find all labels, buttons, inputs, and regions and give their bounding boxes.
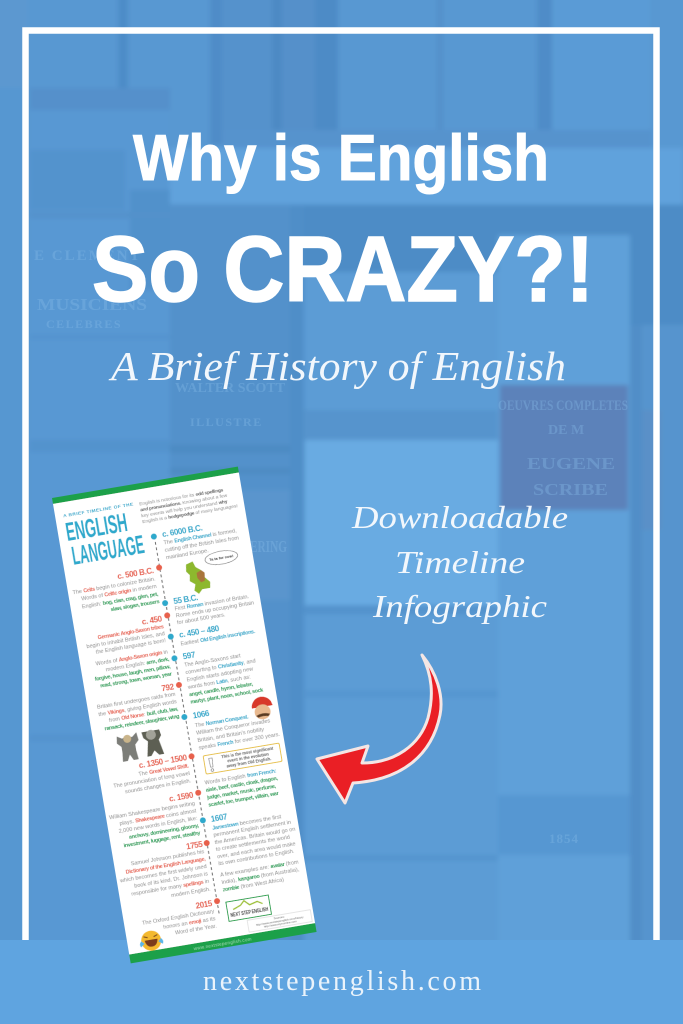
entry: 792: Britain first undergoes raids from bbox=[97, 692, 176, 711]
entry: c. 450–480 bbox=[178, 618, 256, 648]
entry: 1755: Dictionary of the English Language, bbox=[125, 856, 207, 876]
logo: Next Step English bbox=[226, 895, 271, 921]
title line 2: So CRAZY?! bbox=[92, 217, 594, 321]
entry: 792: 792 bbox=[161, 682, 175, 693]
intro paragraph: and pronunciations. Knowing about a few bbox=[140, 493, 228, 513]
icon: Norman soldier head bbox=[250, 695, 275, 721]
entry: 2015: Word of the Year. bbox=[175, 923, 218, 937]
entry: c. 6000 B.C. bbox=[161, 518, 241, 561]
entry: words from French: judge, market, music, perfume, bbox=[206, 784, 277, 801]
entry: 2015: 2015 bbox=[195, 899, 213, 911]
entry: 1607: its own contributions to English. bbox=[218, 848, 295, 867]
entry: c. 6000 B.C.: The English Channel is formed, bbox=[163, 528, 238, 546]
entry: words from French: aisle, beef, castle, cloak, dragon, bbox=[206, 776, 279, 794]
entry: 792: from Old Norse: bull, club, law, bbox=[109, 706, 179, 724]
entry: 597: martyr, plant, noon, school, sock bbox=[190, 687, 264, 706]
sheet heading: LANGUAGE bbox=[69, 529, 146, 571]
entry: 792 bbox=[95, 682, 181, 733]
entry: c. 450: c. 450 bbox=[141, 614, 163, 627]
entry: 1755: Samuel Johnson publishes his bbox=[130, 849, 205, 867]
entry: c. 1590 bbox=[107, 790, 201, 851]
entry: c. 1590: anchovy, domineering, gloomy, bbox=[129, 823, 200, 841]
intro paragraph: English is a hodgepodge of many languages! bbox=[142, 503, 238, 525]
timeline spine bbox=[154, 536, 220, 916]
entry: c. 1590: plays. Shakespeare coins almost bbox=[119, 808, 197, 827]
entry: 1755 bbox=[115, 840, 212, 907]
faint spine lettering: OEUVRES COMPLETES bbox=[498, 398, 628, 414]
icon: map of Britain with speech bubble: Ta ta for now! bbox=[209, 554, 234, 562]
entry: c. 500 B.C.: Words of Celtic origin in modern bbox=[81, 584, 157, 602]
entry: c. 450: read, strong, town, woman, year bbox=[100, 672, 172, 690]
entry: c. 450: forgive, house, laugh, men, pillow, bbox=[94, 664, 172, 683]
entry: c. 450: begin to inhabit British Isles, and bbox=[86, 631, 165, 650]
entry: 1066: William the Conqueror invades bbox=[196, 718, 271, 737]
credits box: http://www.etymonline.com bbox=[263, 919, 298, 929]
callout text: downloadable timeline infographic: Timeline bbox=[395, 544, 525, 580]
entry: 597: words from Latin, such as: bbox=[187, 674, 252, 691]
callout box: most significant event: event in the evolution bbox=[227, 751, 270, 763]
logo: Next Step English: NEXT STEP ENGLISH bbox=[230, 907, 269, 919]
entry: 1607 bbox=[210, 801, 304, 893]
credits box: http://www.nextstepenglish.com/history bbox=[256, 915, 304, 927]
entry: 1755: which becomes the first widely used bbox=[119, 864, 207, 885]
entry: 1066: Britain, and Britain's nobility bbox=[197, 727, 265, 744]
entry: c. 450: Words of Anglo-Saxon origin in bbox=[95, 649, 168, 667]
entry: 2015: The Oxford English Dictionary bbox=[142, 909, 215, 927]
entry: c. 500 B.C.: c. 500 B.C. bbox=[117, 566, 154, 581]
icon: two vikings bbox=[116, 728, 164, 762]
entry: c. 450 bbox=[83, 614, 173, 691]
sheet bbox=[52, 467, 317, 963]
entry: c. 1350–1500: c. 1350 – 1500 bbox=[138, 753, 188, 770]
entry: c. 1590: William Shakespeare begins writing bbox=[109, 801, 196, 821]
entry: 2015: honors an emoji as its bbox=[163, 916, 216, 931]
intro paragraph bbox=[139, 485, 238, 525]
entry: 1607: India), kangaroo (from Australia), bbox=[221, 867, 300, 886]
entry: 1066: 1066 bbox=[192, 709, 211, 721]
entry: 55 B.C. bbox=[173, 584, 256, 626]
bottom green bar with url: www.nextstepenglish.com bbox=[193, 936, 252, 951]
entry: 792: the Vikings, giving English words bbox=[98, 699, 178, 718]
entry: 597: converting to Christianity, and bbox=[185, 658, 256, 676]
entry: c. 450–480: Earliest Old English inscriptions. bbox=[180, 629, 256, 648]
callout box: most significant event: This is the most significant bbox=[221, 746, 274, 759]
entry: 55 B.C.: for about 500 years. bbox=[177, 612, 226, 626]
entry: 55 B.C.: Rome ends up occupying Britain bbox=[175, 600, 255, 619]
entry: 1607: zombie (from West Africa) bbox=[222, 877, 285, 893]
fourth book bbox=[498, 235, 630, 950]
faint spine lettering: DE M bbox=[548, 423, 584, 438]
entry: words from French bbox=[203, 768, 281, 809]
entry: 1607: to create settlements the world bbox=[216, 835, 290, 853]
entry: c. 6000 B.C.: cutting off the British Isles from bbox=[164, 535, 240, 554]
faint spine lettering: WALTER SCOTT bbox=[175, 381, 286, 396]
subtitle: A Brief History of English bbox=[108, 343, 566, 389]
entry: c. 500 B.C.: The Celts begin to colonize Britain. bbox=[72, 576, 156, 596]
second book bbox=[170, 205, 292, 950]
faint spine lettering: ERING bbox=[250, 537, 287, 556]
faint spine lettering: EUGENE bbox=[527, 454, 615, 473]
entry: 1066 bbox=[192, 698, 281, 752]
faint spine lettering: MUSICIENS bbox=[37, 295, 147, 314]
arrow pointing to the infographic bbox=[317, 655, 441, 803]
intro paragraph: key events will help you understand why bbox=[141, 499, 228, 519]
title line 1: Why is English bbox=[133, 121, 549, 194]
entry: c. 450–480: c. 450 – 480 bbox=[178, 624, 221, 640]
entry: c. 1350–1500 bbox=[110, 753, 192, 797]
faint spine lettering: ILLUSTRE bbox=[190, 415, 263, 429]
faint spine lettering bbox=[34, 248, 628, 846]
entry: c. 1350–1500: The Great Vowel Shift. bbox=[138, 763, 190, 778]
entry: c. 450: Germanic Anglo-Saxon tribes bbox=[97, 624, 164, 641]
sheet heading: A BRIEF TIMELINE OF THE bbox=[63, 501, 135, 519]
callout box: most significant event bbox=[203, 743, 282, 774]
sheet heading bbox=[63, 501, 146, 571]
entry: words from French: scarlet, toe, trumpet, villain, war bbox=[208, 791, 279, 809]
entry: 597 bbox=[181, 640, 264, 706]
entry: 55 B.C.: First Roman invasion of Britain. bbox=[174, 594, 250, 613]
entry: 55 B.C.: 55 B.C. bbox=[173, 593, 199, 606]
entry: 1607: Jamestown becomes the first bbox=[212, 814, 282, 832]
credits box bbox=[247, 910, 312, 932]
entry: 597: 597 bbox=[182, 650, 197, 661]
entry: 1066: The Norman Conquest. bbox=[195, 714, 250, 729]
entry: 597: angel, candle, hymn, lobster, bbox=[189, 682, 254, 698]
entry: 1607: permanent English settlement in bbox=[213, 820, 292, 839]
callout box: most significant event: away from Old English. bbox=[226, 756, 272, 769]
entry: 1066: speaks French for over 300 years. bbox=[198, 732, 281, 751]
left big book bbox=[0, 88, 30, 950]
entry: c. 6000 B.C.: c. 6000 B.C. bbox=[161, 523, 203, 539]
icon: map of Britain with speech bubble bbox=[184, 548, 243, 595]
entry: 1607: A few examples are: avatar (from bbox=[220, 859, 300, 879]
top green bar bbox=[52, 467, 239, 504]
entry: c. 450: the English language is born! bbox=[95, 638, 167, 656]
faint spine lettering: 1854 bbox=[549, 831, 579, 846]
credits box: Sources: bbox=[273, 915, 285, 920]
entry: 1607: over, and each area would make bbox=[217, 841, 296, 860]
entry: 597: The Anglo-Saxons start bbox=[184, 653, 242, 669]
entry: c. 1590: c. 1590 bbox=[168, 791, 195, 804]
entry: c. 500 B.C.: slaw, slogan, trousers bbox=[110, 599, 160, 613]
third book bbox=[304, 272, 499, 950]
entry: c. 1350–1500: sounds changes in English. bbox=[125, 778, 192, 795]
entry: 1755: modern English. bbox=[171, 887, 211, 899]
entry: c. 6000 B.C.: mainland Europe. bbox=[166, 548, 210, 561]
entry: 2015 bbox=[140, 899, 218, 942]
callout text: downloadable timeline infographic: Downloadable bbox=[351, 499, 568, 535]
entry: c. 1590: 2,000 new words in English, like: bbox=[118, 816, 198, 835]
callout text: downloadable timeline infographic bbox=[351, 499, 568, 624]
footer url: nextstepenglish.com bbox=[203, 966, 481, 997]
bottom green bar with url bbox=[129, 923, 317, 963]
entry: 1607: the Americas. Britain would go on bbox=[214, 827, 296, 846]
footer band bbox=[0, 940, 683, 1024]
faint spine lettering: SCRIBE bbox=[533, 480, 608, 499]
sheet heading: ENGLISH bbox=[63, 507, 130, 547]
faint spine lettering: E CLEMENT bbox=[34, 248, 142, 264]
callout text: downloadable timeline infographic: Infographic bbox=[372, 588, 547, 624]
entry: c. 500 B.C.: English: bog, clan, crag, glen, pet, bbox=[82, 592, 159, 610]
entry: 1755: 1755 bbox=[185, 840, 204, 851]
entry: 1755: book of its kind. Dr. Johnson is bbox=[134, 871, 209, 890]
entry: c. 1590: investment, luggage, rent, stealthy bbox=[123, 830, 201, 849]
entry: c. 1350–1500: The pronunciation of long vowel bbox=[113, 771, 190, 790]
icon: laughing emoji bbox=[138, 929, 165, 952]
entry: c. 450: modern English: arm, dork, bbox=[105, 657, 170, 673]
entry: 1607: 1607 bbox=[210, 812, 229, 824]
infographic preview: tilted timeline sheet bbox=[52, 467, 317, 963]
entry: words from French: Words to English from French: bbox=[204, 768, 277, 786]
timeline dots bbox=[150, 533, 220, 905]
entry: 792: ransack, reindeer, slaughter, wing bbox=[104, 714, 180, 732]
faint spine lettering: CELEBRES bbox=[46, 317, 122, 331]
intro paragraph: English is notorious for its odd spellings bbox=[139, 487, 224, 507]
entry: 1755: responsible for many spellings in bbox=[131, 879, 210, 898]
entry: 597: English starts adopting new bbox=[186, 666, 254, 684]
entry: c. 500 B.C. bbox=[70, 566, 161, 619]
shelf and dark gap bbox=[170, 148, 683, 204]
